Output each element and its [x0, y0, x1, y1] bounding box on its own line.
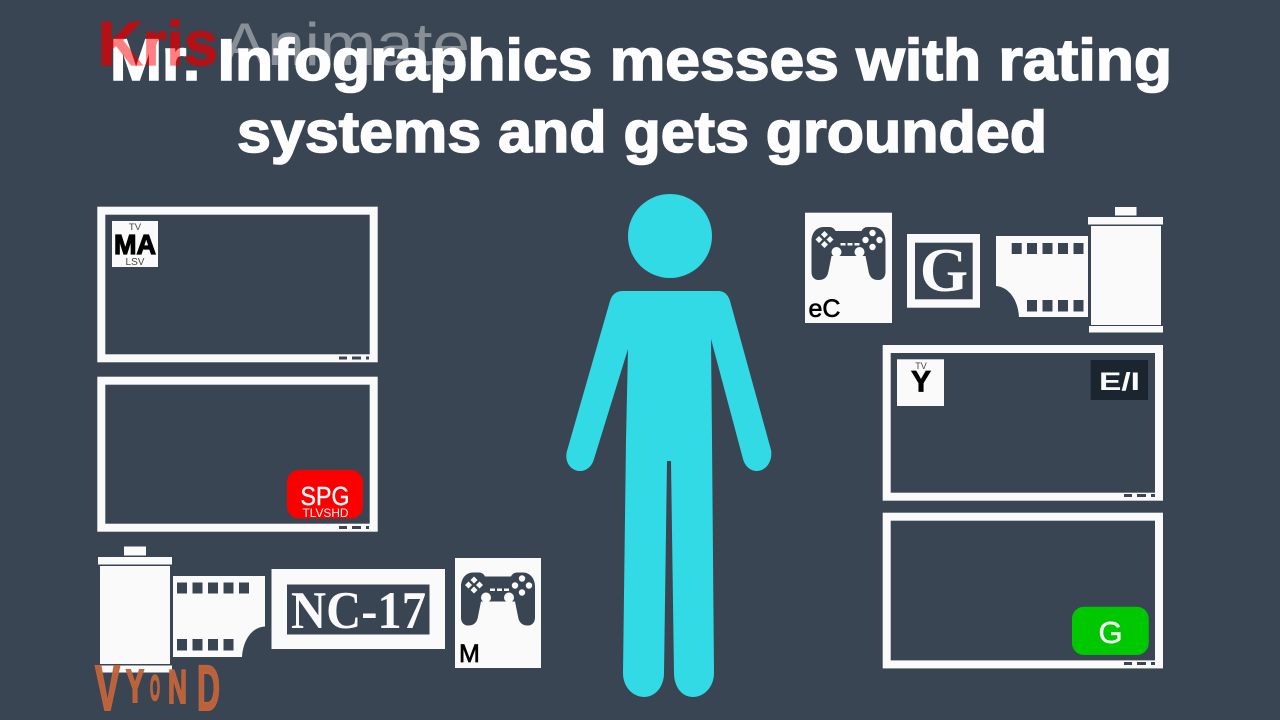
badge: SPG [287, 470, 363, 520]
body [566, 291, 771, 697]
title [110, 28, 1172, 165]
badge: NC-17: NC-17 [291, 582, 426, 640]
watermark: Vyond logo: Y [126, 660, 144, 712]
icon: game controller [812, 227, 886, 280]
icon: film canister left [98, 546, 172, 672]
watermark: Kris base layer: Kris [98, 10, 218, 79]
badge: G green: G [1098, 615, 1123, 650]
head [628, 194, 712, 278]
badge: TV-MA: LSV [126, 257, 145, 268]
icon: film strip right [996, 236, 1088, 317]
game rating card: eC [805, 213, 892, 323]
panel: TV screen rated G [887, 517, 1159, 664]
title: systems and gets grounded [237, 100, 1047, 165]
badge: TV-Y: Y [911, 366, 931, 398]
panel: TV screen rated TV-MA [101, 211, 374, 358]
badge: E/I [1091, 360, 1148, 400]
figure: cyan person [566, 194, 771, 697]
watermark: Vyond logo: O [150, 669, 160, 708]
badge: TV-MA [112, 221, 158, 268]
icon: film strip left [173, 576, 265, 657]
panel: TV screen rated TV-Y and E/I [887, 349, 1159, 497]
title: Mr. Infographics messes with rating [110, 28, 1172, 93]
badge: G green [1072, 607, 1149, 655]
game rating card: eC: eC [808, 295, 840, 323]
game rating card: M [455, 558, 541, 668]
watermark: Kris overlay tint: Kris [98, 10, 218, 79]
badge: TV-Y [897, 359, 944, 406]
watermark: Vyond logo: N [168, 660, 187, 713]
game rating card: M: M [459, 640, 480, 668]
icon: game controller [461, 572, 535, 626]
badge: TV-MA: MA [114, 229, 156, 260]
icon: film canister right [1088, 207, 1163, 332]
watermark: Vyond logo [95, 652, 220, 720]
watermark: Animate: Animate [222, 11, 470, 78]
badge: TV-Y: TV [915, 361, 927, 371]
badge: G film rating [907, 234, 980, 308]
badge: SPG: TLVSHD [302, 506, 349, 520]
badge: G film rating: G [920, 237, 968, 305]
badge: E/I: E/I [1099, 368, 1140, 396]
badge: TV-MA: TV [129, 222, 142, 233]
badge: SPG: SPG [300, 481, 350, 511]
panel: TV screen rated SPG [101, 381, 374, 528]
badge: NC-17 [272, 569, 445, 649]
